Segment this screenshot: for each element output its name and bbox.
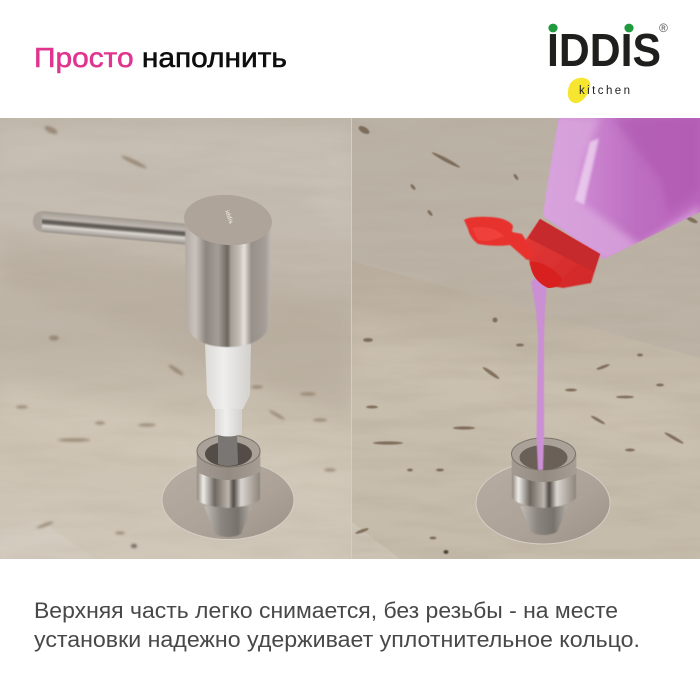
head engraved mark: iddis — [223, 210, 234, 225]
body text — [34, 598, 640, 652]
bottle liquid dark area — [616, 118, 698, 208]
collar interior — [205, 442, 252, 466]
logo green dots — [548, 24, 634, 32]
base collar — [197, 451, 260, 508]
collar opening — [512, 438, 576, 470]
soap stream — [531, 278, 547, 470]
cap nozzle — [530, 262, 562, 288]
photo panel: dispenser assembled on stone — [0, 118, 351, 559]
cap ribbed ring — [528, 219, 600, 272]
logo registered mark: ® — [659, 21, 668, 35]
pump head body — [185, 219, 272, 347]
body text line 2: установки надежно удерживает уплотнительное кольцо. — [34, 627, 640, 652]
rod shaft — [42, 211, 190, 245]
logo yellow blob — [568, 78, 590, 103]
pump rod handle — [33, 211, 190, 245]
lid inner — [472, 227, 504, 241]
collar opening — [197, 435, 260, 467]
collar upper band — [512, 458, 576, 482]
flip lid — [464, 217, 536, 260]
stone pits left — [16, 124, 336, 548]
bottle highlight — [575, 138, 599, 205]
white lower tube — [215, 406, 242, 436]
base collar — [512, 454, 576, 508]
grey pump shaft — [218, 434, 238, 466]
stone pits right — [355, 124, 698, 554]
logo wordmark: IDDIS — [547, 24, 661, 76]
bottle cap — [525, 219, 600, 288]
collar interior — [520, 445, 568, 470]
body text line 1: Верхняя часть легко снимается, без резьбы - на месте — [34, 598, 618, 623]
photo panel: pouring soap into base — [352, 117, 700, 559]
base cone — [204, 506, 252, 537]
stone background right — [352, 118, 700, 559]
base cone — [520, 506, 568, 535]
pump head top — [184, 195, 272, 246]
bottle body — [540, 117, 700, 262]
soap bottle — [538, 117, 700, 262]
logo: IDDIS kitchen — [547, 21, 668, 103]
dispenser pump, removed from base — [33, 192, 294, 540]
title: Просто наполнить — [34, 42, 287, 73]
white upper tube — [205, 342, 251, 409]
base plate — [476, 462, 610, 544]
bottle pale shoulder — [538, 117, 700, 262]
collar upper band — [197, 456, 260, 480]
rod rounded tip — [33, 211, 42, 232]
logo kitchen label: kitchen — [579, 85, 630, 97]
divider between photos — [351, 118, 352, 559]
base fitting right — [476, 438, 610, 544]
base plate — [162, 460, 294, 540]
stone background left — [0, 118, 351, 559]
